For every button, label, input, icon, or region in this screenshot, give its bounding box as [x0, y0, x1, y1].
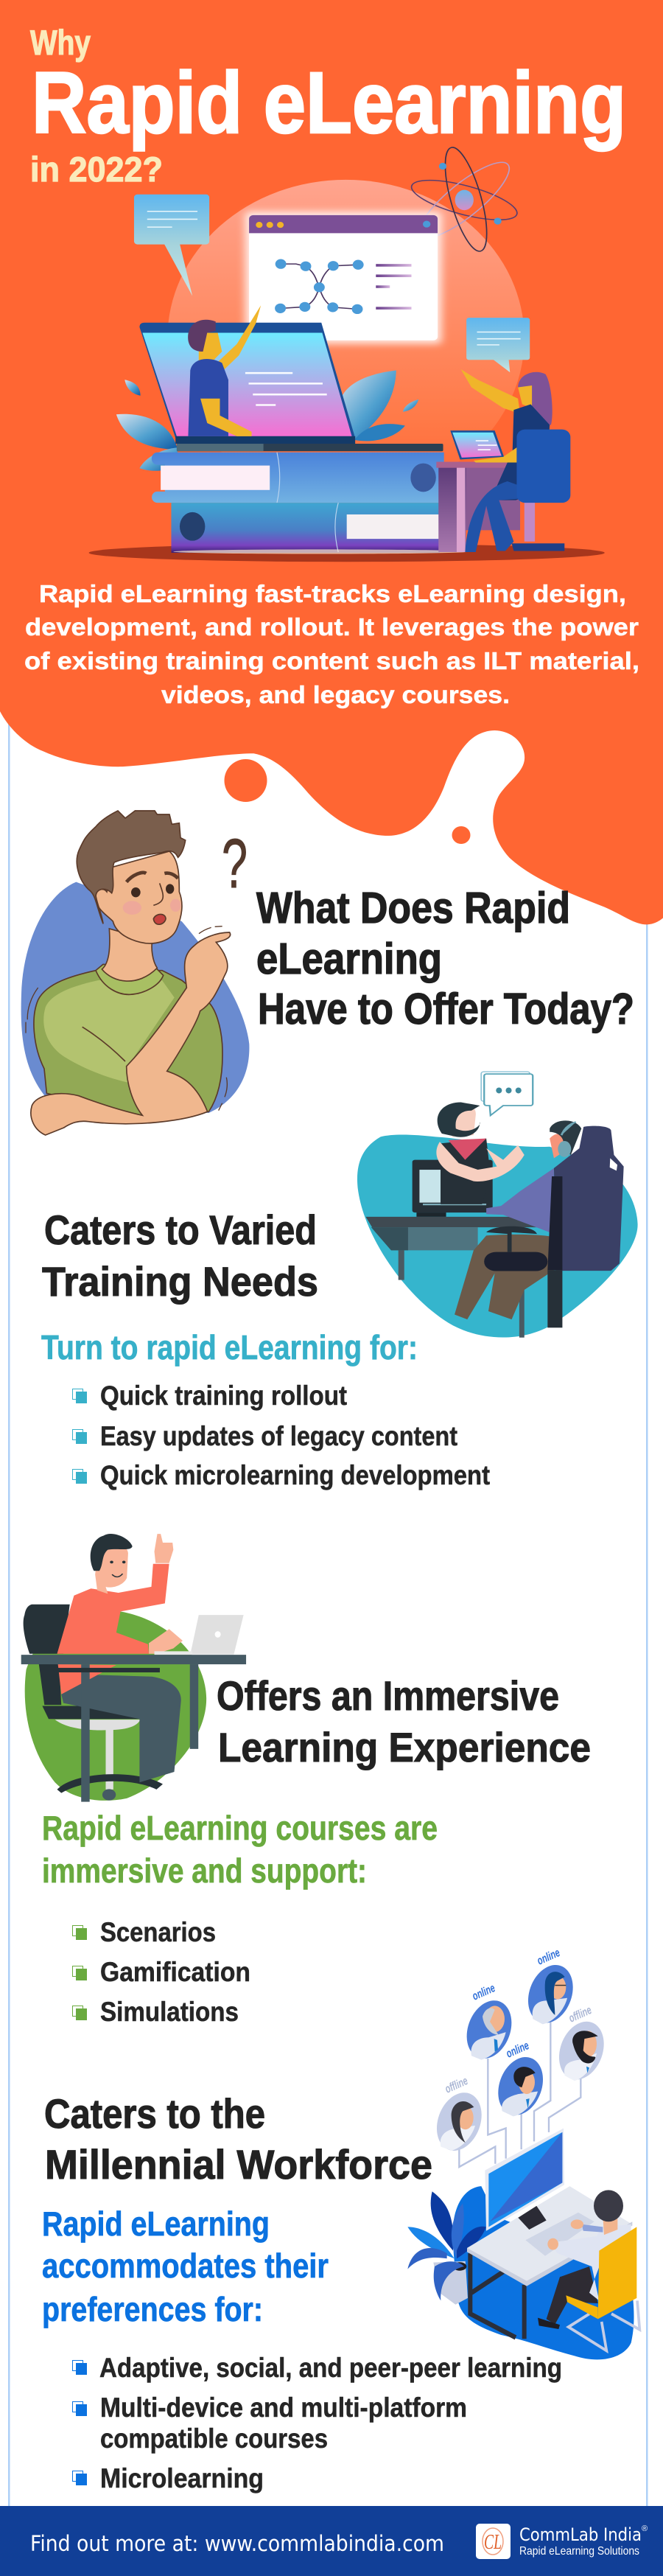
teal illustration: video call: [357, 1072, 638, 1338]
bullet 2: compatible courses: [100, 2423, 328, 2454]
hero illustration: [89, 144, 605, 562]
face details: [127, 873, 178, 924]
green blob: [25, 1610, 206, 1801]
right content border: [646, 884, 648, 2513]
bullet 2: [72, 2392, 467, 2454]
orange header blob: [0, 0, 663, 924]
subheading line 1: Rapid eLearning: [42, 2205, 270, 2243]
chair: [24, 1605, 163, 1801]
subheading line 2: accommodates their: [42, 2247, 329, 2285]
blue illustration: online and offline learners: [407, 1957, 639, 2359]
gaming chair: [484, 1126, 624, 1327]
bullet 1: Adaptive, social, and peer-peer learning: [99, 2353, 562, 2383]
ground shadow: [89, 544, 605, 562]
potted plant: [407, 2191, 486, 2305]
head: [91, 1534, 133, 1594]
bullet 2: Easy updates of legacy content: [100, 1421, 457, 1451]
teal blob: [357, 1135, 638, 1338]
desk: [21, 1655, 246, 1802]
paragraph line 2: development, and rollout. It leverages the power: [25, 613, 639, 640]
raised hand: [155, 1534, 173, 1563]
intro paragraph: [24, 580, 639, 708]
bullet 3: Quick microlearning development: [100, 1460, 490, 1490]
heading line 1: Caters to Varied: [44, 1207, 317, 1253]
profile: bearded man: [550, 2014, 612, 2087]
tag: offline bearded man: offline: [567, 2004, 594, 2025]
yellow chair: [566, 2227, 639, 2350]
small laptop: [450, 430, 504, 459]
section: immersive learning experience: [42, 1672, 591, 2027]
keyboard: [525, 2213, 594, 2256]
trousers: [61, 1675, 181, 1782]
bullet 2: Gamification: [100, 1957, 250, 1987]
blue backdrop: [21, 882, 249, 1113]
green shirt: [34, 964, 222, 1117]
connector lines: [459, 2022, 580, 2167]
logo tagline: Rapid eLearning Solutions: [519, 2545, 639, 2558]
paragraph line 4: videos, and legacy courses.: [161, 681, 510, 708]
person: [538, 2190, 631, 2329]
title line: in 2022?: in 2022?: [30, 150, 163, 189]
stacked books: [152, 453, 469, 554]
hair: [77, 811, 186, 924]
section heading: [256, 884, 634, 1033]
footer band: [0, 2506, 663, 2576]
woman's chair: [512, 430, 570, 551]
paragraph line 3: of existing training content such as ILT material,: [24, 647, 639, 674]
motion marks: [26, 926, 227, 1111]
monitor: [485, 2128, 564, 2231]
bullet 2: Multi-device and multi-platform: [100, 2392, 467, 2423]
profile: man in centre: [490, 2049, 552, 2123]
man pointing at window: [188, 305, 261, 436]
tag: online older man: online: [471, 1982, 497, 2003]
tag: online man: online: [505, 2039, 531, 2061]
right leaves: [340, 371, 405, 441]
title line: Why: Why: [30, 23, 91, 62]
title: [30, 23, 626, 189]
tag: online woman: online: [536, 1947, 562, 1968]
green illustration: man at laptop: [21, 1534, 246, 1802]
heading line 2: Millennial Workforce: [45, 2141, 432, 2188]
left leaves: [116, 380, 418, 471]
profile: woman offline: [428, 2085, 490, 2159]
tag: offline woman: offline: [443, 2075, 470, 2096]
blue blob: [453, 2186, 634, 2359]
speech bubble left: [134, 195, 209, 296]
registered mark: ®: [642, 2524, 648, 2533]
bullet 1: Scenarios: [100, 1917, 216, 1947]
bullet 3: Microlearning: [100, 2463, 264, 2493]
section: millennial workforce: [42, 2090, 562, 2493]
peach semicircle: [167, 180, 525, 497]
subheading line 1: Rapid eLearning courses are: [42, 1809, 438, 1847]
monitor: [413, 1160, 493, 1217]
speech bubble: [481, 1072, 533, 1115]
atom icon: [407, 144, 522, 254]
heading line 1: What Does Rapid: [256, 884, 570, 932]
text lines: [376, 264, 412, 310]
heading line 2: eLearning: [256, 935, 442, 983]
subheading: Turn to rapid eLearning for:: [41, 1328, 418, 1366]
logo badge: [476, 2524, 511, 2559]
left content border: [8, 700, 10, 2513]
question mark: ?: [222, 825, 248, 903]
bullet 1: Quick training rollout: [100, 1381, 347, 1411]
man in headset: [455, 1120, 581, 1319]
woman on screen: [436, 1103, 525, 1204]
man's torso and arm: [57, 1564, 169, 1654]
logo name: CommLab India: [519, 2524, 642, 2545]
desk: [436, 462, 520, 552]
hand and forearm: [31, 932, 231, 1135]
subheading line 2: immersive and support:: [42, 1851, 367, 1890]
bullet 3: Simulations: [100, 1997, 239, 2027]
orange droplet small: [452, 826, 470, 844]
thinking man illustration: [21, 811, 249, 1135]
neck: [102, 929, 157, 981]
subheading line 3: preferences for:: [42, 2290, 263, 2328]
typing hand: [149, 1629, 183, 1654]
footer link text: Find out more at: www.commlabindia.com: [30, 2531, 444, 2556]
laptop: [139, 323, 443, 451]
profile: older man: [458, 1993, 520, 2067]
woman at desk: [461, 369, 552, 552]
blush cheeks: [123, 899, 181, 915]
desk: [467, 2186, 632, 2339]
profile: woman with glasses: [519, 1957, 581, 2031]
head: [96, 851, 182, 943]
logo badge: CL: [484, 2531, 502, 2554]
heading line 2: Training Needs: [42, 1258, 318, 1305]
heading line 1: Offers an Immersive: [217, 1672, 559, 1719]
desk: [366, 1217, 539, 1338]
browser window: [245, 212, 441, 343]
speech bubble right: [466, 318, 530, 372]
heading line 1: Caters to the: [44, 2090, 265, 2137]
paragraph line 1: Rapid eLearning fast-tracks eLearning design,: [39, 580, 626, 607]
heading line 2: Learning Experience: [218, 1724, 591, 1770]
network diagram: [275, 259, 364, 314]
laptop: [155, 1615, 244, 1655]
section: caters to varied training needs: [41, 1207, 490, 1490]
orange droplet large: [224, 759, 267, 802]
